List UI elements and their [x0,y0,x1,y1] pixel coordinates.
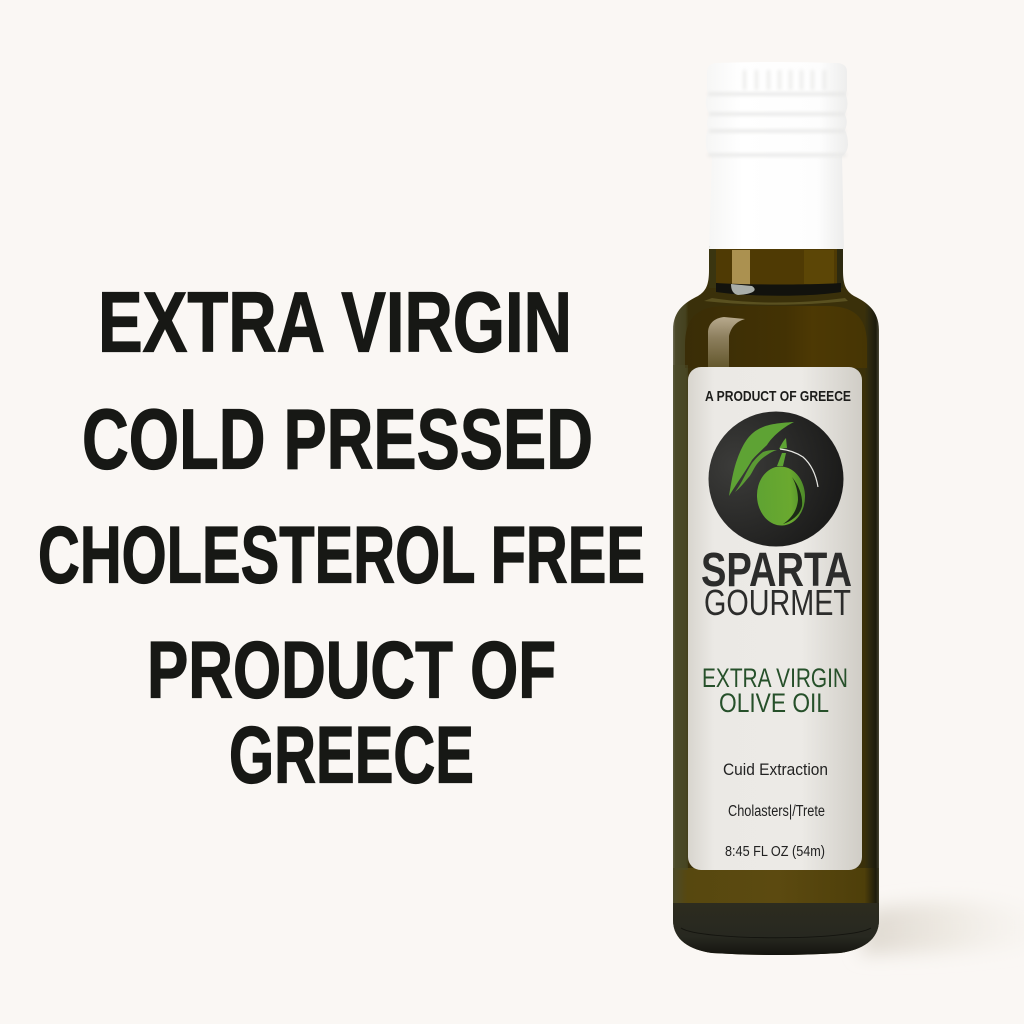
product label [688,367,862,870]
shoulder band [704,298,848,305]
brand name gourmet: GOURMET [704,582,851,623]
text: cholesterol free: CHOLESTEROL FREE [38,510,645,600]
brand name sparta: SPARTA [701,544,852,597]
logo olive shading [783,477,802,524]
bottle neck glass [709,246,843,288]
capsule sleeve [709,155,844,249]
bottle shadow [860,902,1024,954]
logo stem [777,438,787,466]
text: cold pressed: COLD PRESSED [82,392,593,488]
neck oil line [716,283,841,296]
text: extra virgin: EXTRA VIRGIN [98,276,572,370]
cap knurling [743,70,826,90]
label line extraction: Cuid Extraction [723,760,828,779]
shoulder inner glass [685,306,867,368]
text: product of: PRODUCT OF [147,626,556,716]
screw cap top [706,62,848,157]
logo olive [755,465,807,527]
dark base [673,903,879,955]
cap grooves [708,94,846,155]
logo second leaf [735,450,777,492]
label background [688,367,862,870]
logo leaf [729,422,794,496]
logo: olive on black disc [708,412,844,546]
neck highlight [731,284,755,295]
lower oil band [673,868,879,905]
feature list heading text [38,276,645,800]
product name line two: OLIVE OIL [719,688,829,718]
label line cholesterol: Cholasters|/Trete [728,803,825,820]
product name line one: EXTRA VIRGIN [702,663,848,693]
label volume: 8:45 FL OZ (54m) [725,843,825,860]
logo arc highlight [780,449,818,487]
side glass under label [673,365,688,870]
text: greece: GREECE [229,710,474,800]
olive oil bottle [673,246,879,955]
bottle body [673,270,879,955]
label origin text: A PRODUCT OF GREECE [705,388,851,405]
shoulder highlight [708,317,745,368]
white bottle cap [706,62,848,249]
base seam [681,928,871,938]
